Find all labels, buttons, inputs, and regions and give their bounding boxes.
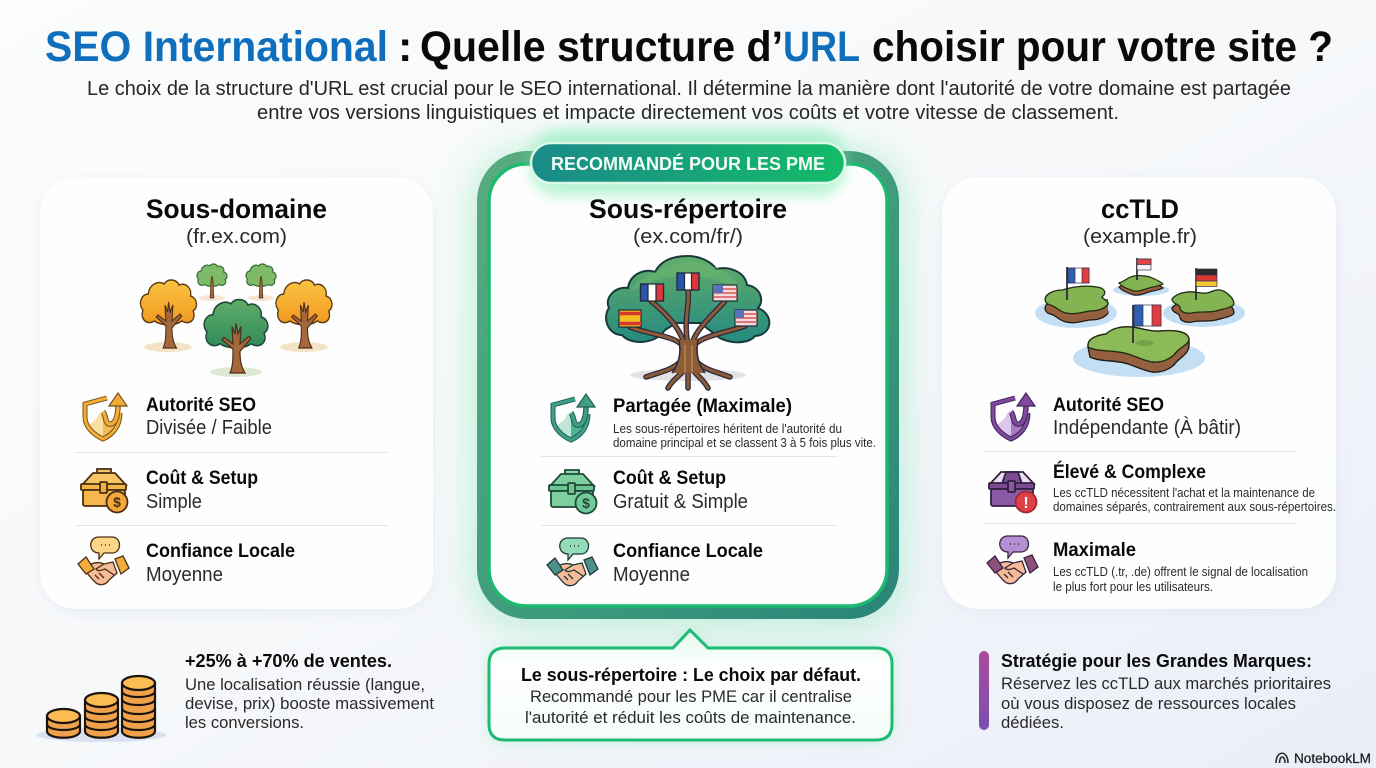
- subtitle: Le choix de la structure d'URL est crucial pour le SEO international. Il détermine la manière dont l'autorité de votre domaine est partagée: [87, 78, 1291, 100]
- text: élevé et complexe: Élevé & Complexe: [1053, 461, 1206, 483]
- text: partagée: domaine principal et se classent 3 à 5 fois plus vite.: [613, 436, 876, 450]
- text: stratégie: [1001, 651, 1331, 732]
- text: coût: [146, 468, 258, 513]
- title: URL: [783, 23, 860, 71]
- text: coût: Simple: [146, 491, 202, 513]
- text: confiance: Moyenne: [146, 564, 223, 586]
- text: autorité SEO: Autorité SEO: [146, 395, 256, 416]
- text: coût: Coût & Setup: [613, 468, 726, 489]
- url: example.fr: (example.fr): [1083, 226, 1197, 248]
- illustration: islands with flags: [1035, 258, 1245, 377]
- heading: sous-répertoire: Sous-répertoire: [589, 194, 787, 224]
- illustration: separate trees: [140, 264, 332, 377]
- text: stratégie: Réservez les ccTLD aux marchés prioritaires: [1001, 674, 1331, 693]
- badge: recommandé: RECOMMANDÉ POUR LES PME: [551, 153, 825, 174]
- text: coût: Coût & Setup: [146, 468, 258, 489]
- text: maximale: Maximale: [1053, 540, 1136, 561]
- text: autorité SEO: [146, 395, 272, 439]
- text: partagée: [613, 396, 876, 450]
- icon: handshake purple: [987, 536, 1038, 584]
- text: confiance: Confiance Locale: [146, 541, 295, 562]
- panel: sous-domaine: [40, 177, 433, 612]
- text: stratégie: Stratégie pour les Grandes Marques:: [1001, 651, 1312, 671]
- text: ventes: les conversions.: [185, 713, 304, 732]
- text: coût: Gratuit & Simple: [613, 491, 748, 513]
- icon: toolbox green: $: [582, 495, 590, 511]
- icon: coin stacks: [36, 676, 166, 742]
- text: autorité SEO: [1053, 395, 1241, 439]
- text: maximale: [1053, 540, 1308, 594]
- text: élevé et complexe: [1053, 461, 1336, 514]
- title: [45, 23, 1333, 71]
- text: élevé et complexe: domaines séparés, contrairement aux sous-répertoires.: [1053, 500, 1336, 514]
- icon: shield orange: [85, 393, 127, 439]
- icon: toolbox orange: [81, 469, 128, 512]
- text: ventes: devise, prix) booste massivement: [185, 694, 434, 713]
- text: coût: [613, 468, 748, 513]
- text: maximale: le plus fort pour les utilisateurs.: [1053, 580, 1213, 594]
- panel: ccTLD: [942, 177, 1336, 612]
- text: stratégie: dédiées.: [1001, 713, 1064, 732]
- text: stratégie: où vous disposez de ressources locales: [1001, 694, 1296, 713]
- callout: choix par défaut: l'autorité et réduit les coûts de maintenance.: [525, 708, 856, 727]
- heading: ccTLD: ccTLD: [1101, 194, 1179, 224]
- icon: shield green: [553, 394, 595, 440]
- url: fr.ex.com: (fr.ex.com): [186, 226, 287, 248]
- icon: toolbox purple with alert: [989, 472, 1036, 512]
- panel: sous-répertoire: [468, 130, 908, 632]
- subtitle: entre vos versions linguistiques et impacte directement vos coûts et votre vitesse de classement.: [257, 102, 1119, 124]
- callout: grandes marques: [979, 651, 1331, 732]
- illustration: big tree with flags: [606, 256, 769, 388]
- text: confiance: [146, 541, 295, 586]
- text: élevé et complexe: Les ccTLD nécessitent l'achat et la maintenance de: [1053, 486, 1315, 500]
- heading: sous-domaine: Sous-domaine: [146, 194, 327, 224]
- icon: handshake orange: [78, 537, 129, 585]
- badge: recommandé: [531, 130, 845, 196]
- text: autorité SEO: Autorité SEO: [1053, 395, 1164, 416]
- text: ventes: +25% à +70% de ventes.: [185, 651, 392, 671]
- text: confiance: [613, 541, 763, 586]
- accent bar: [979, 651, 989, 730]
- icon: toolbox orange: $: [113, 494, 121, 510]
- url: ex.com/fr/: (ex.com/fr/): [633, 226, 743, 248]
- title: SEO International: [45, 23, 388, 71]
- title: choisir pour votre site ?: [872, 23, 1333, 71]
- title: :: [398, 23, 412, 71]
- text: ventes: [185, 651, 434, 732]
- callout: choix par défaut: [489, 630, 892, 740]
- text: partagée: Les sous-répertoires héritent de l'autorité du: [613, 422, 842, 436]
- callout: stat ventes: [36, 651, 434, 742]
- icon: handshake green: [547, 538, 598, 586]
- logo: NotebookLM: NotebookLM: [1294, 751, 1371, 766]
- icon: toolbox green: [549, 470, 596, 514]
- text: confiance: Confiance Locale: [613, 541, 763, 562]
- icon: shield purple: [993, 393, 1035, 439]
- text: maximale: Les ccTLD (.tr, .de) offrent le signal de localisation: [1053, 565, 1308, 579]
- title: Quelle structure d’: [420, 23, 783, 71]
- text: confiance: Moyenne: [613, 564, 690, 586]
- text: ventes: Une localisation réussie (langue,: [185, 675, 425, 694]
- text: autorité SEO: Divisée / Faible: [146, 417, 272, 439]
- text: autorité SEO: Indépendante (À bâtir): [1053, 416, 1241, 439]
- callout: choix par défaut: Le sous-répertoire : Le choix par défaut.: [521, 664, 861, 685]
- icon: toolbox purple with alert: !: [1023, 495, 1029, 512]
- text: partagée: Partagée (Maximale): [613, 396, 792, 417]
- subtitle: [87, 78, 1291, 124]
- callout: choix par défaut: Recommandé pour les PME car il centralise: [530, 687, 852, 706]
